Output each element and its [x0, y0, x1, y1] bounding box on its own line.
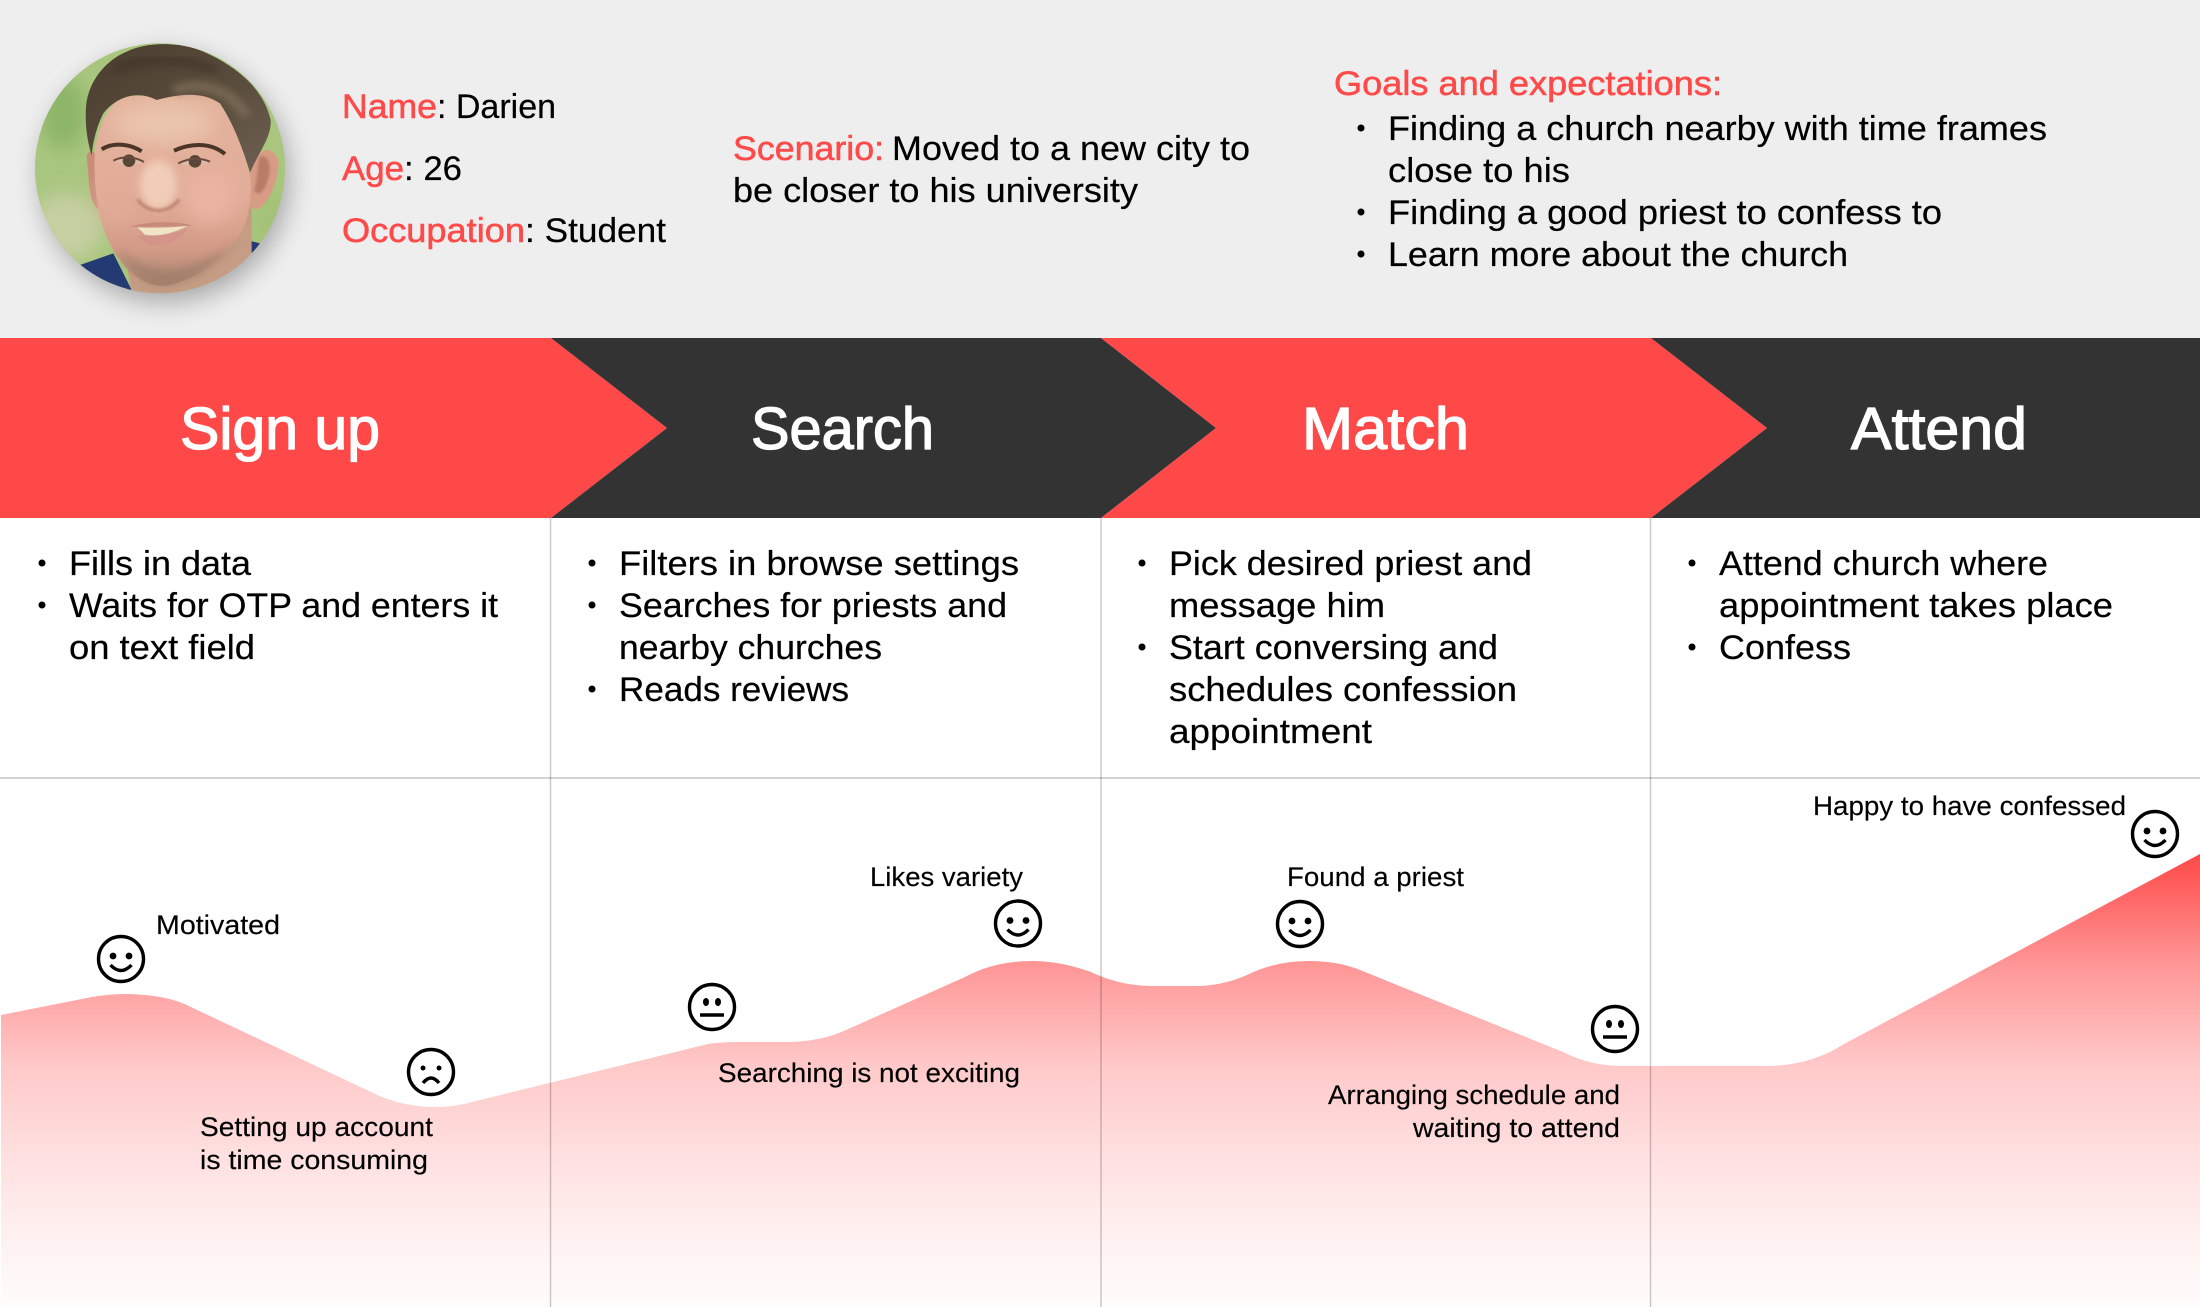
- scenario text: [733, 130, 1250, 210]
- stage chevron: Match: [1101, 338, 1767, 518]
- persona details: name, age, occupation: Age: [342, 150, 404, 188]
- goals and expectations list: Finding a good priest to confess to: [1388, 194, 1942, 232]
- actions list: Search: Reads reviews: [619, 671, 849, 709]
- label: Arranging schedule and waiting to attend: Arranging schedule and: [1328, 1080, 1620, 1110]
- emotion icon: happy, motivated: [98, 936, 144, 982]
- actions list: Search: Filters in browse settings: [619, 545, 1019, 583]
- emotion icon: sad: [408, 1050, 454, 1094]
- label: Setting up account is time consuming: [200, 1112, 434, 1175]
- stage chevron: Match: Match: [1302, 396, 1469, 462]
- label: Likes variety: Likes variety: [870, 862, 1024, 892]
- label: Setting up account is time consuming: Setting up account: [200, 1112, 434, 1142]
- actions list: Match: schedules confession: [1169, 671, 1517, 709]
- persona details: name, age, occupation: Occupation: [342, 212, 525, 250]
- scenario text: Moved to a new city to: [892, 130, 1250, 168]
- actions list: Attend: [1688, 545, 2113, 667]
- actions list: Sign up: [38, 545, 499, 667]
- emotion icon: happy, confessed: [2132, 812, 2178, 856]
- label: Motivated: Motivated: [156, 910, 280, 940]
- stage chevron: Search: [551, 338, 1216, 518]
- stage chevron: Search: Search: [751, 396, 934, 462]
- stage chevron: Attend: [1651, 338, 2200, 518]
- persona details: name, age, occupation: [342, 88, 667, 250]
- actions list: Sign up: Waits for OTP and enters it: [69, 587, 499, 625]
- actions list: Attend: Attend church where: [1719, 545, 2048, 583]
- actions list: Match: message him: [1169, 587, 1385, 625]
- persona details: name, age, occupation: Name: [342, 88, 437, 126]
- label: Searching is not exciting: Searching is not exciting: [718, 1058, 1020, 1088]
- actions list: Search: [588, 545, 1019, 709]
- label: Setting up account is time consuming: is time consuming: [200, 1145, 428, 1175]
- persona header panel: [0, 0, 2200, 338]
- goals and expectations list: [1334, 65, 2047, 274]
- label: Arranging schedule and waiting to attend: waiting to attend: [1412, 1113, 1620, 1143]
- emotion curve area chart: [1, 854, 2200, 1307]
- persona details: name, age, occupation: : Darien: [437, 88, 556, 126]
- scenario text: Scenario:: [733, 130, 884, 168]
- persona details: name, age, occupation: : 26: [404, 150, 462, 188]
- label: Arranging schedule and waiting to attend: [1328, 1080, 1620, 1143]
- goals and expectations list: close to his: [1388, 152, 1570, 190]
- emotion icon: happy, found a priest: [1278, 902, 1322, 946]
- label: Found a priest: Found a priest: [1287, 862, 1465, 892]
- goals and expectations list: Learn more about the church: [1388, 236, 1848, 274]
- actions list: Match: Start conversing and: [1169, 629, 1498, 667]
- actions list: Sign up: on text field: [69, 629, 255, 667]
- emotion icon: neutral, arranging: [1592, 1006, 1638, 1052]
- actions list: Match: Pick desired priest and: [1169, 545, 1532, 583]
- actions list: Attend: Confess: [1719, 629, 1851, 667]
- label: Happy to have confessed: Happy to have confessed: [1813, 791, 2126, 821]
- goals and expectations list: Goals and expectations:: [1334, 65, 1722, 103]
- emotion icon: neutral: [690, 984, 734, 1030]
- stage chevron: Sign up: Sign up: [180, 396, 380, 462]
- actions list: Match: appointment: [1169, 713, 1373, 751]
- stage chevron: Attend: Attend: [1851, 396, 2027, 462]
- goals and expectations list: Finding a church nearby with time frames: [1388, 110, 2047, 148]
- avatar portrait: Darien: [30, 40, 290, 303]
- actions list: Sign up: Fills in data: [69, 545, 251, 583]
- actions list: Match: [1138, 545, 1532, 751]
- actions list: Search: Searches for priests and: [619, 587, 1007, 625]
- emotion icon: happy, likes variety: [996, 901, 1040, 946]
- actions list: Search: nearby churches: [619, 629, 882, 667]
- stage chevron: Sign up: [0, 338, 667, 518]
- actions list: Attend: appointment takes place: [1719, 587, 2113, 625]
- scenario text: be closer to his university: [733, 172, 1138, 210]
- persona details: name, age, occupation: : Student: [525, 212, 667, 250]
